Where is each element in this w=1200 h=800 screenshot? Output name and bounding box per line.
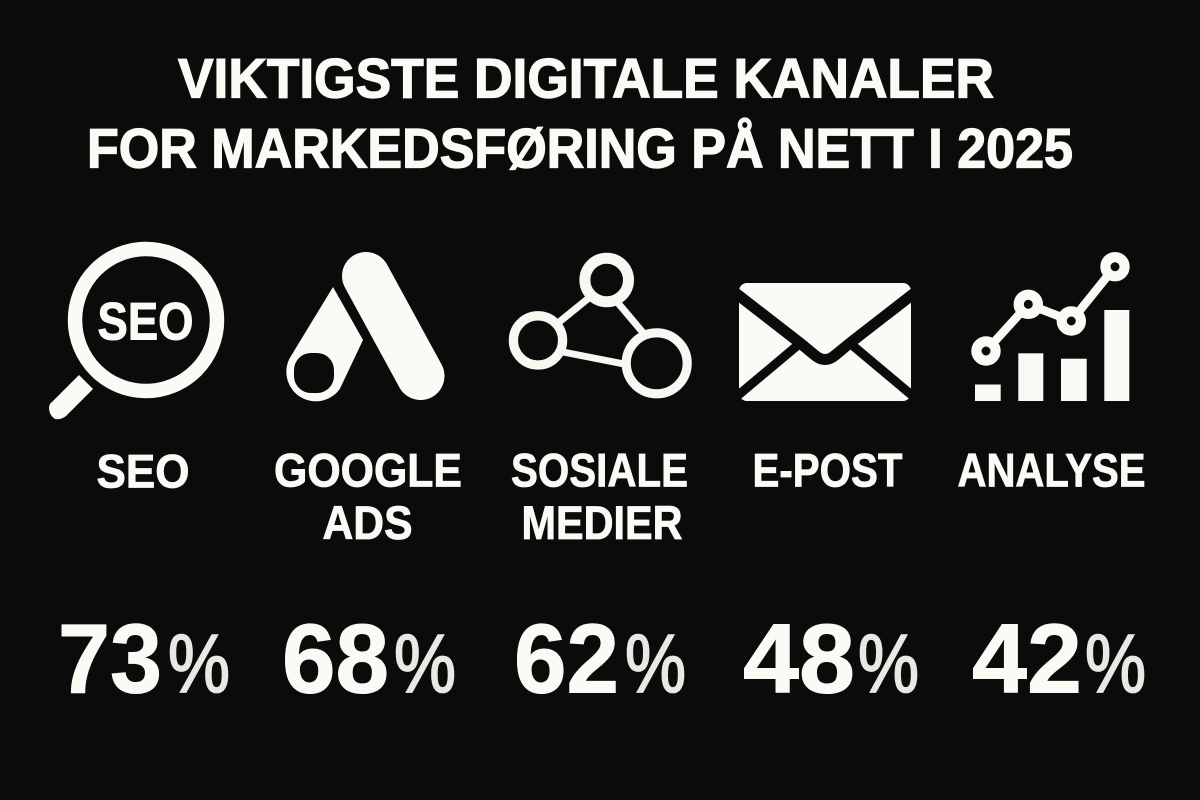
percentages	[58, 604, 1146, 714]
percentages: %	[1085, 617, 1146, 710]
labels: SOSIALE	[511, 443, 688, 496]
icon: SEO magnifying glass	[49, 249, 217, 419]
percentages: 42	[972, 604, 1082, 714]
labels: ADS	[322, 496, 412, 549]
title: VIKTIGSTE DIGITALE KANALER	[178, 46, 994, 110]
labels: SEO	[96, 444, 190, 498]
icon: Google Ads logo	[286, 276, 420, 401]
title: FOR MARKEDSFØRING PÅ NETT I 2025	[87, 116, 1073, 180]
percentages: %	[625, 617, 686, 710]
percentages: 48	[743, 604, 855, 714]
labels	[96, 443, 1146, 549]
icon: SEO magnifying glass: SEO	[98, 292, 194, 352]
title	[87, 46, 1073, 180]
labels: E-POST	[752, 443, 903, 496]
labels: ANALYSE	[958, 443, 1146, 496]
icon: envelope	[733, 283, 917, 401]
labels: MEDIER	[522, 496, 682, 549]
percentages: 73	[58, 604, 162, 714]
percentages: 68	[282, 604, 389, 714]
percentages: %	[168, 617, 230, 710]
icon: analytics chart	[975, 257, 1129, 401]
percentages: 62	[514, 604, 619, 714]
percentages: %	[394, 617, 456, 710]
percentages: %	[858, 617, 919, 710]
icon: social network nodes	[513, 258, 687, 394]
labels: GOOGLE	[274, 443, 462, 496]
